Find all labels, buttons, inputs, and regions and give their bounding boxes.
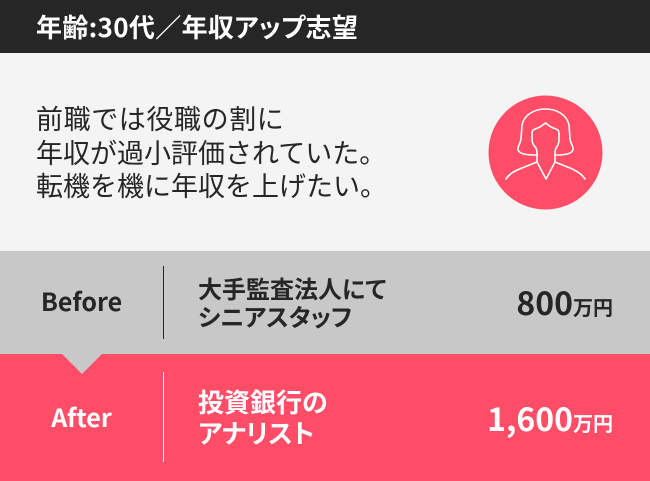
profile statement: 年収が過小評価されていた。 <box>36 132 386 170</box>
panel: after <box>0 354 650 481</box>
after job: 投資銀行の <box>198 383 328 420</box>
profile statement <box>36 98 387 204</box>
profile statement: 転機を機に年収を上げたい。 <box>36 165 387 204</box>
heading: 年齢:30代／年収アップ志望 <box>36 8 358 45</box>
after divider <box>163 372 164 462</box>
icon: woman avatar <box>488 96 602 210</box>
after job: アナリスト <box>198 414 314 451</box>
before job <box>198 270 386 333</box>
profile statement: 前職では役職の割に <box>36 98 284 137</box>
before salary: 800万円 <box>516 279 613 325</box>
after job <box>198 383 328 451</box>
header bar <box>0 0 650 53</box>
arrow: before to after <box>62 354 102 374</box>
before divider <box>163 266 164 339</box>
before label: Before <box>41 283 122 319</box>
before job: 大手監査法人にて <box>198 270 386 305</box>
after label: After <box>51 399 112 435</box>
panel: profile <box>0 53 650 251</box>
before job: シニアスタッフ <box>198 298 352 333</box>
after salary: 1,600万円 <box>487 395 613 441</box>
panel: before <box>0 251 650 354</box>
